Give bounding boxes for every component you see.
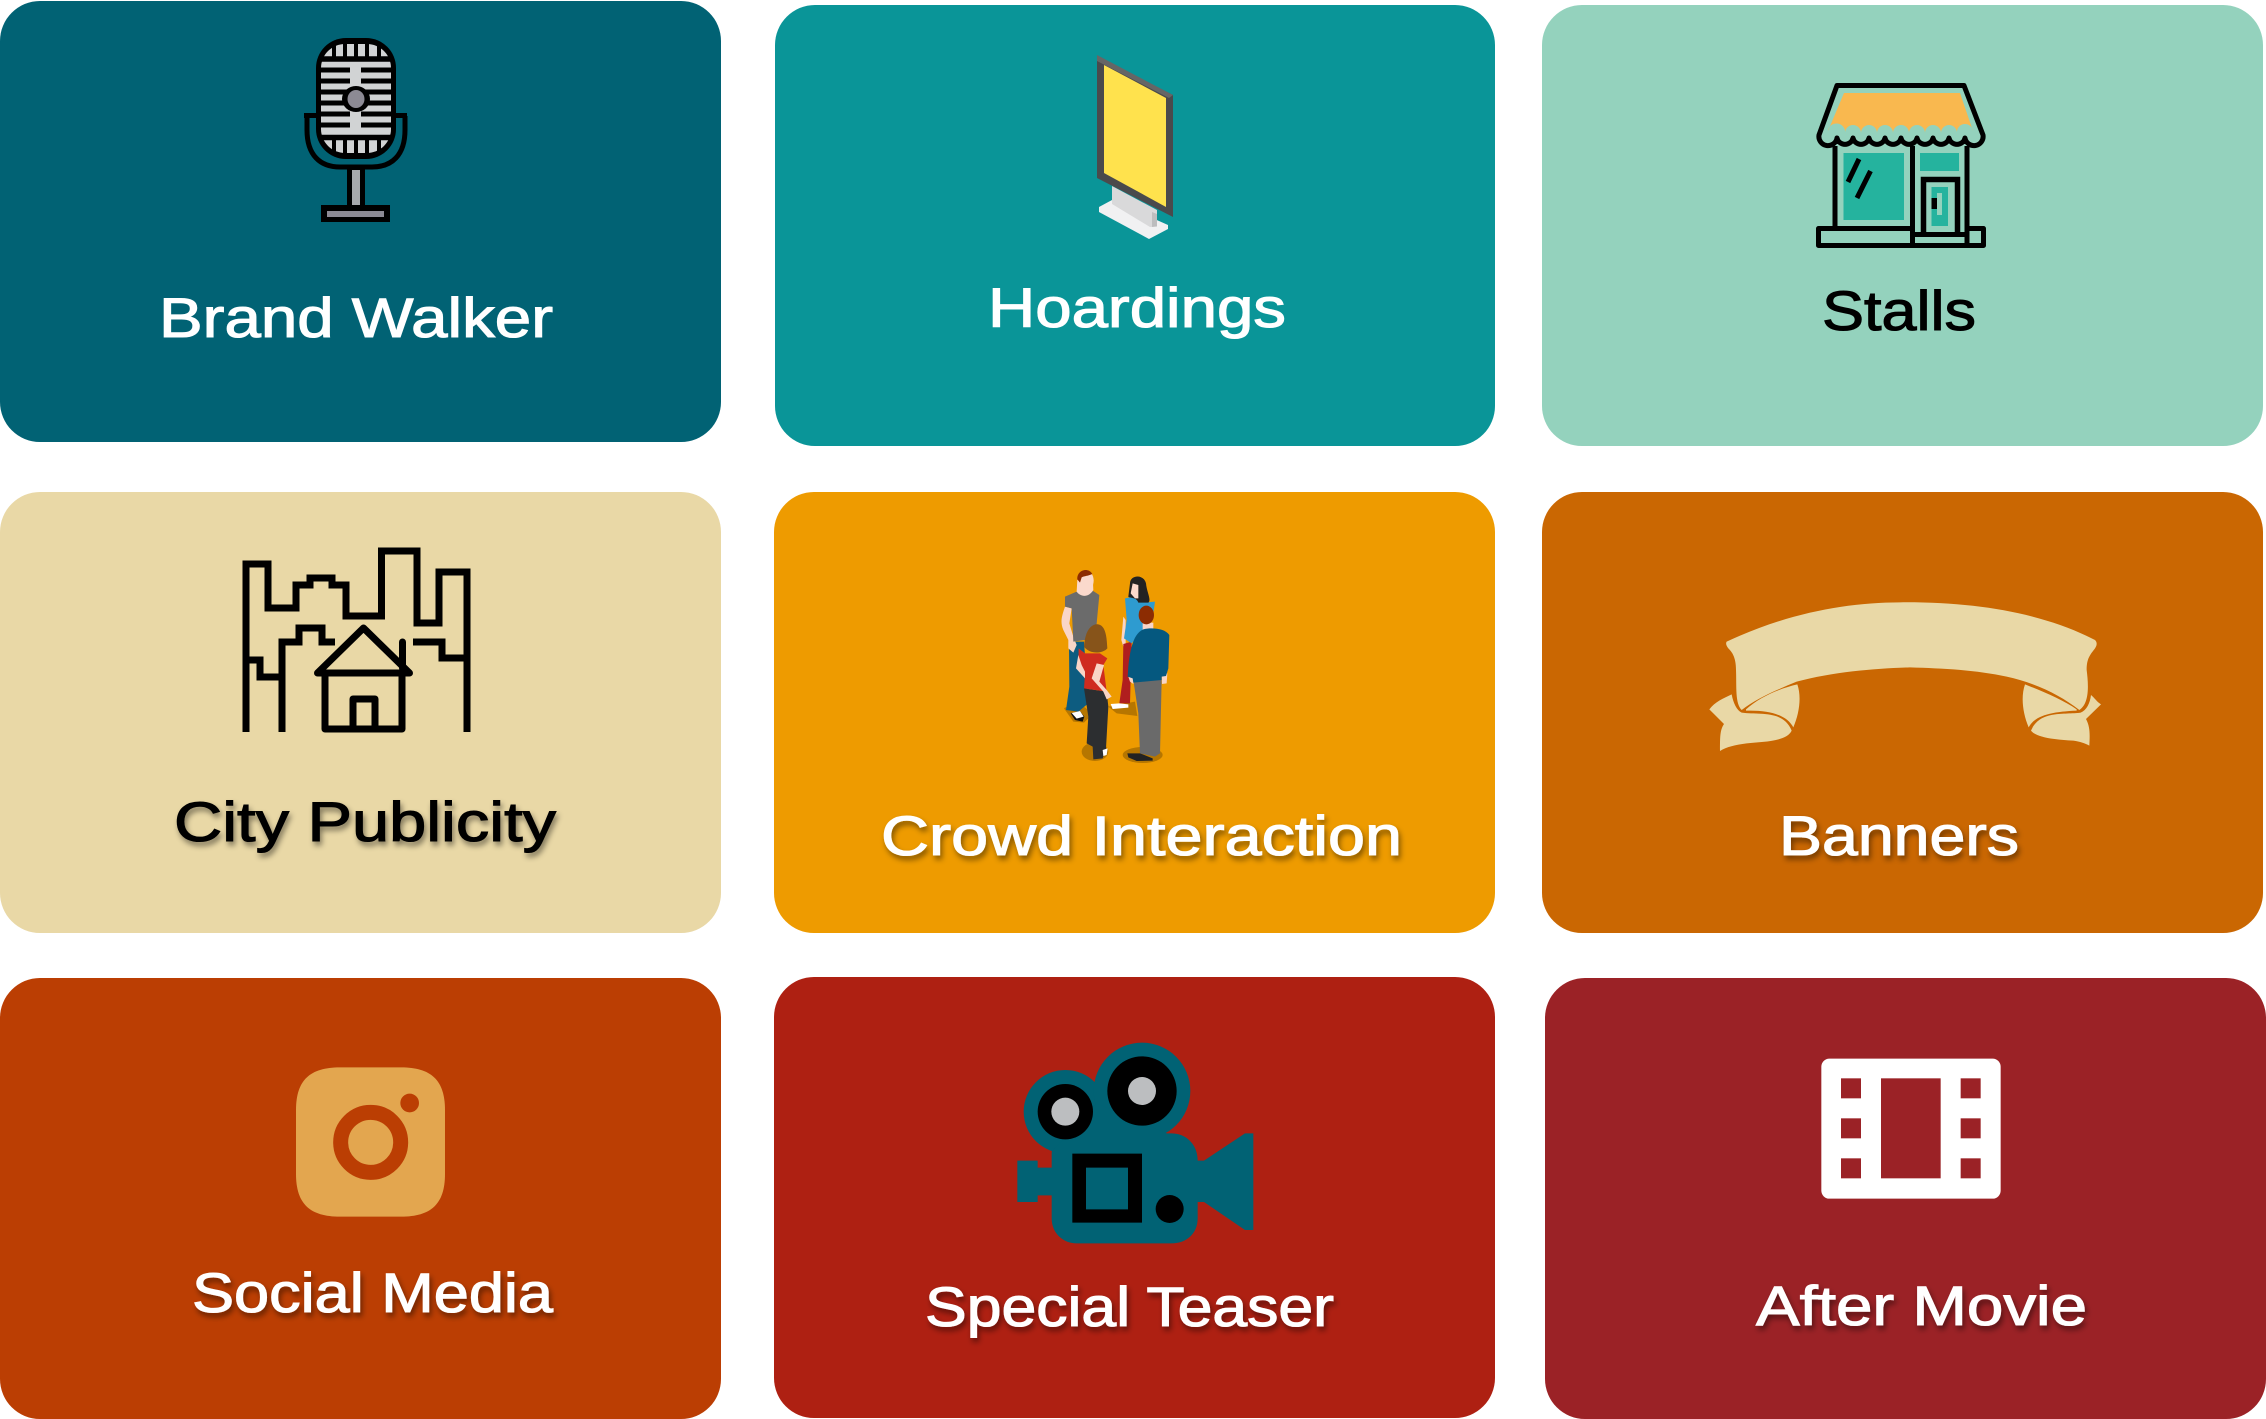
icon: microphone [304, 38, 407, 222]
panel: Crowd Interaction [774, 492, 1495, 933]
panel: Special Teaser [774, 977, 1495, 1418]
panel: Hoardings [775, 5, 1495, 446]
icon: film camera [1017, 1043, 1253, 1243]
panel: Stalls [1542, 5, 2263, 446]
icon: film strip [1821, 1059, 2001, 1199]
label: Social Media: Social Media [192, 1261, 554, 1324]
panel: After Movie [1545, 978, 2266, 1419]
panel: Social Media [0, 978, 721, 1419]
icon: city and house [246, 551, 467, 732]
label: Special Teaser: Special Teaser [925, 1275, 1334, 1338]
icon: hoarding board [1097, 55, 1173, 239]
label: After Movie: After Movie [1756, 1274, 2087, 1337]
label: Banners: Banners [1779, 804, 2019, 867]
icon: shop stall [1818, 86, 1984, 246]
label: Stalls: Stalls [1822, 279, 1976, 342]
panel: Brand Walker [0, 1, 721, 442]
label: Brand Walker: Brand Walker [159, 286, 553, 349]
label: Hoardings: Hoardings [988, 276, 1286, 339]
panel: Banners [1542, 492, 2263, 933]
panel: City Publicity [0, 492, 721, 933]
label: Crowd Interaction: Crowd Interaction [881, 804, 1402, 867]
icon: ribbon banner [1709, 602, 2101, 751]
label: City Publicity: City Publicity [174, 790, 556, 853]
icon: group of people [1062, 570, 1169, 763]
icon: instagram camera [296, 1067, 445, 1217]
